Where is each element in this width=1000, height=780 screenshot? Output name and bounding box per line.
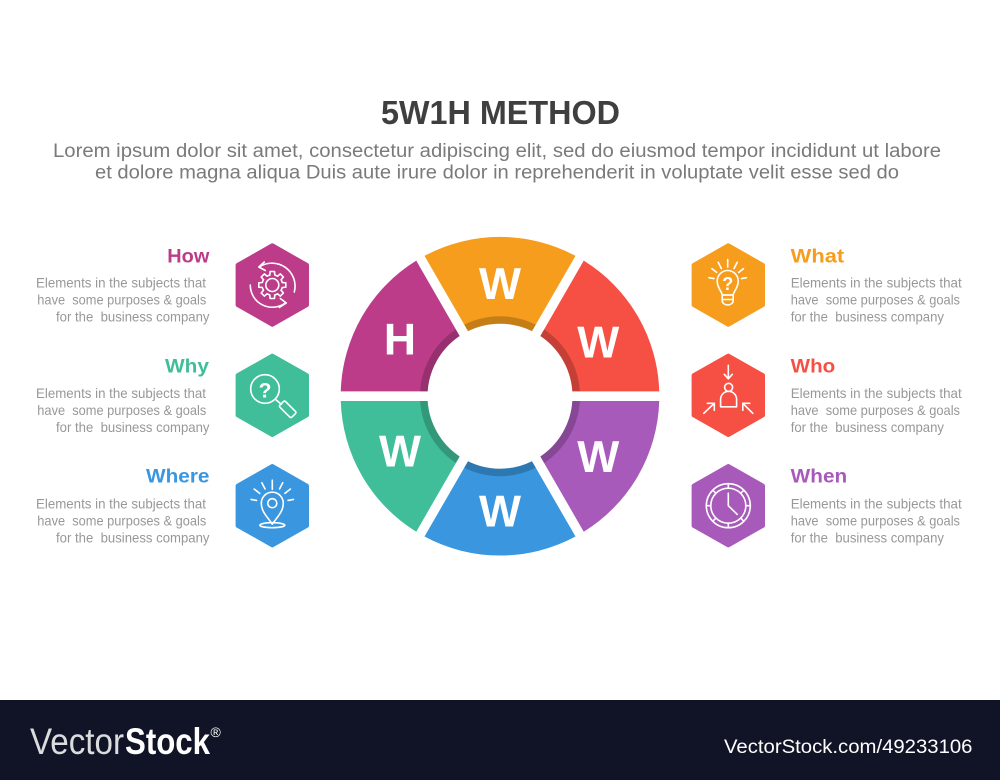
text block: What: Elements in the subjects that bbox=[791, 275, 962, 291]
footer image id: VectorStock.com/49233106 bbox=[724, 736, 972, 758]
footer logo: Stock bbox=[125, 721, 210, 762]
text block: Who bbox=[791, 356, 962, 435]
hexagon icon: What light bulb: ? bbox=[722, 274, 733, 294]
text block: Who: Elements in the subjects that bbox=[791, 385, 962, 401]
text block: When bbox=[791, 467, 962, 545]
segment: What (orange W) bbox=[424, 237, 576, 331]
text block: Where: for the business company bbox=[56, 529, 210, 545]
text block: Why bbox=[36, 356, 210, 435]
text block: Why: for the business company bbox=[56, 419, 210, 435]
segment: When (purple W) bbox=[519, 363, 676, 541]
hexagon icon: Where location pin bbox=[238, 466, 307, 545]
hexagon icon: How gear with cycle arrows bbox=[238, 245, 307, 325]
hexagon icon: Why magnifier with question mark bbox=[238, 356, 307, 435]
title: 5W1H METHOD bbox=[381, 94, 620, 131]
text block: Where: have some purposes & goals bbox=[37, 512, 206, 528]
segment: Why (green W) bbox=[324, 363, 481, 541]
text block: When: have some purposes & goals bbox=[791, 512, 960, 528]
text block: Who: Who bbox=[791, 356, 835, 377]
footer logo bbox=[30, 721, 222, 762]
segment: Who (red W) bbox=[519, 251, 676, 429]
text block: What: What bbox=[791, 246, 845, 267]
text block: Where: Elements in the subjects that bbox=[36, 495, 206, 511]
segment: How (magenta H): H bbox=[384, 316, 416, 365]
text block: How: How bbox=[167, 246, 210, 267]
text block: Where: Where bbox=[146, 467, 210, 488]
text block: How: have some purposes & goals bbox=[37, 292, 206, 308]
text block: Why: Why bbox=[165, 356, 209, 377]
subtitle text: et dolore magna aliqua Duis aute irure dolor in reprehenderit in voluptate velit esse sed do bbox=[95, 162, 899, 184]
subtitle text: Lorem ipsum dolor sit amet, consectetur adipiscing elit, sed do eiusmod tempor incididunt ut labore bbox=[53, 141, 941, 162]
text block: Why: Elements in the subjects that bbox=[36, 385, 206, 401]
text block: Who: have some purposes & goals bbox=[791, 402, 960, 418]
subtitle text bbox=[53, 141, 941, 184]
hexagon icon: When clock bbox=[694, 466, 763, 545]
footer banner bbox=[0, 700, 1000, 780]
donut chart bbox=[324, 237, 676, 556]
footer logo: ® bbox=[210, 724, 222, 740]
footer logo: Vector bbox=[30, 721, 124, 762]
text block: Who: for the business company bbox=[791, 419, 944, 435]
text block: What bbox=[791, 246, 962, 325]
hexagon icon: Who person with arrows bbox=[694, 356, 763, 435]
segment: Where (blue W): W bbox=[479, 488, 521, 537]
text block: Why: have some purposes & goals bbox=[37, 402, 206, 418]
hexagon icon: What light bulb bbox=[694, 245, 763, 325]
text block: When: for the business company bbox=[791, 529, 944, 545]
text block: How: for the business company bbox=[56, 309, 210, 325]
segment: How (magenta H) bbox=[324, 251, 481, 429]
text block: What: have some purposes & goals bbox=[791, 292, 960, 308]
segment: When (purple W): W bbox=[577, 433, 619, 482]
text block: Where bbox=[36, 467, 210, 545]
text block: How bbox=[36, 246, 210, 325]
text block: What: for the business company bbox=[791, 309, 944, 325]
segment: Who (red W): W bbox=[577, 318, 619, 367]
segment: Why (green W): W bbox=[379, 428, 421, 477]
text block: When: Elements in the subjects that bbox=[791, 495, 962, 511]
segment: What (orange W): W bbox=[479, 260, 521, 309]
hexagon icon: Why magnifier with question mark: ? bbox=[259, 379, 271, 402]
text block: When: When bbox=[791, 467, 847, 488]
segment: Where (blue W) bbox=[424, 461, 576, 556]
text block: How: Elements in the subjects that bbox=[36, 275, 206, 291]
